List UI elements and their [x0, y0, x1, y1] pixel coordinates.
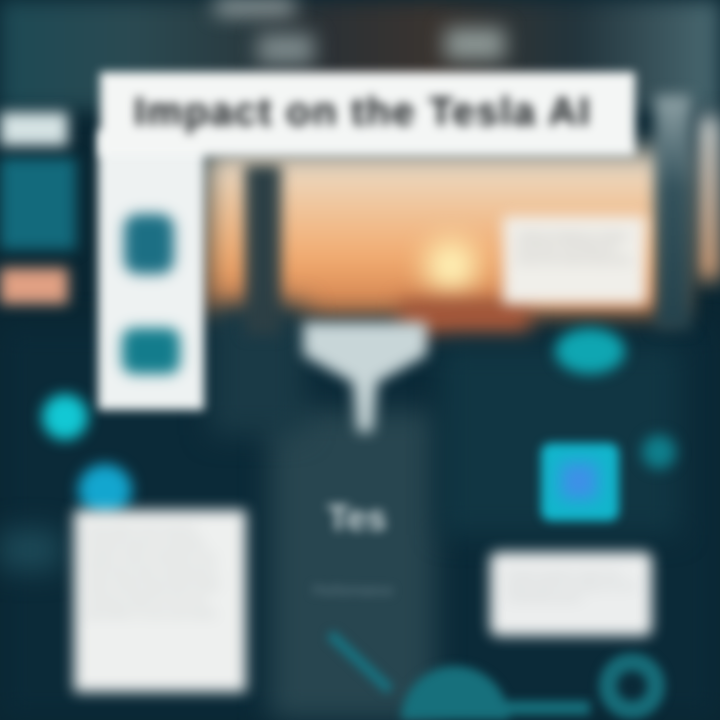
background: lower dark factory	[0, 325, 720, 720]
icon: bright chip	[541, 443, 619, 521]
panel: left icon column	[98, 130, 204, 410]
background: left machine	[210, 305, 305, 435]
background: right machine	[440, 345, 680, 535]
background: horizon glow	[400, 300, 530, 334]
icon: teal cloud	[555, 328, 625, 374]
icon: connector line	[330, 634, 390, 690]
panel: title banner	[100, 72, 635, 156]
label: central machine text: Tes	[327, 497, 387, 538]
text block: card lines: Artificial intelligence shapes production and efficiency across the whole factory line.	[517, 231, 633, 265]
background: right edge sky	[698, 115, 720, 280]
panel: left teal edge	[0, 158, 76, 250]
icon: teal screen	[122, 328, 180, 374]
panel: upper right text card	[503, 216, 646, 304]
icon: teal document	[124, 214, 174, 274]
icon: blue dot	[78, 464, 132, 516]
panel: lower right text card	[490, 552, 652, 636]
panel: left edge light strip	[0, 112, 68, 146]
icon: funnel shape	[292, 312, 438, 442]
pillar: left	[245, 165, 281, 335]
icon: small teal dot	[642, 435, 676, 469]
background: central machine tower	[270, 410, 435, 720]
background: left lower band	[0, 530, 60, 570]
icon: left teal dot	[42, 394, 88, 440]
icon: connector bar	[500, 701, 590, 715]
panel: lower left text card	[74, 510, 246, 692]
icon: ring gear	[608, 662, 656, 710]
label: central lower text: Performance	[313, 582, 393, 598]
icon: chip core	[561, 463, 597, 499]
background: ceiling highlights	[215, 0, 295, 14]
heading: title: Impact on the Tesla AI	[134, 90, 591, 134]
icon: large teal gear	[401, 666, 509, 720]
pillar: right	[655, 95, 691, 330]
text block: lower left lines: Automation and machine learning improve assembly quality, reduce downtime and help teams plan maintenance, while vehicle data feeds better training models for the next generation of cars and robots.	[86, 525, 221, 620]
background: sunset sky	[205, 150, 680, 320]
panel: left edge peach strip	[0, 268, 68, 304]
icon: lower teal gear cluster	[325, 629, 670, 720]
background: sun glow	[425, 240, 477, 292]
background: dark factory ceiling	[0, 0, 720, 110]
text block: lower right lines: Smarter systems create new opportunities for energy use and sustainable growth.	[506, 569, 635, 603]
